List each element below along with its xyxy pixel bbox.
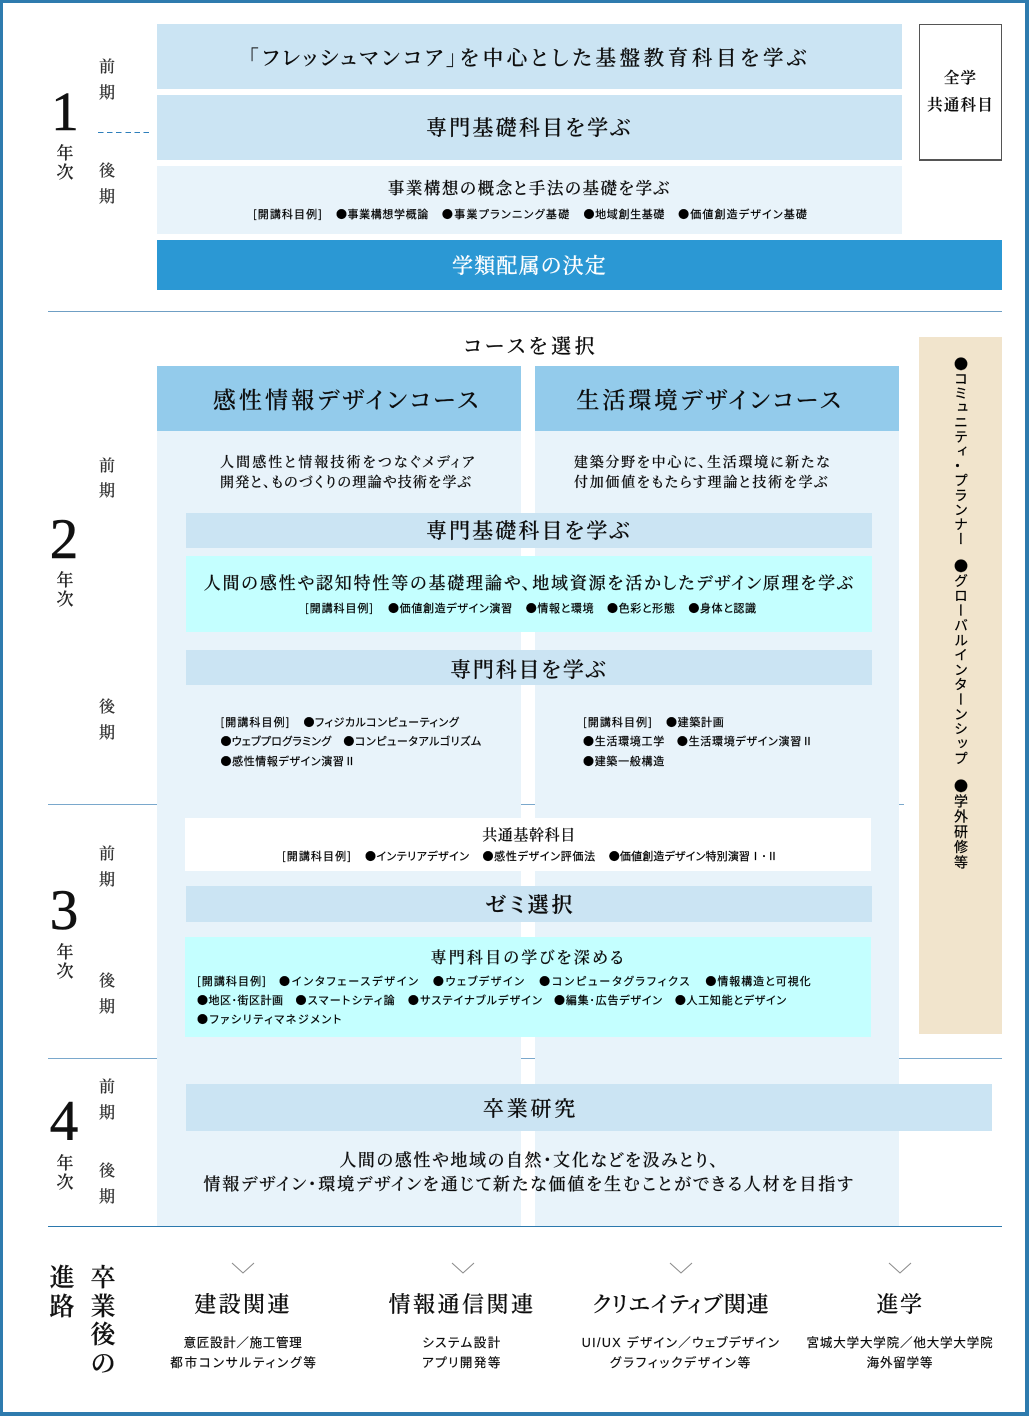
panel: basic theory xyxy=(186,556,872,632)
course examples: sensibility: ●感性情報デザイン演習Ⅱ xyxy=(220,752,356,768)
career details: UI/UX デザイン／ウェブデザイン xyxy=(582,1336,780,1350)
term labels: year 4: 前 xyxy=(99,1079,115,1096)
bar: basic subjects 2: 専門基礎科目を学ぶ xyxy=(426,518,632,542)
course examples: sensibility: ●ウェブプログラミング ●コンピュータアルゴリズム xyxy=(220,733,482,749)
course description: environment: 付加価値をもたらす理論と技術を学ぶ xyxy=(574,476,830,491)
term labels: year 3: 後 xyxy=(99,973,115,990)
band heading: 事業構想の概念と手法の基礎を学ぶ xyxy=(388,179,671,198)
panel heading: 専門科目の学びを深める xyxy=(431,950,625,967)
career details: 海外留学等 xyxy=(867,1352,933,1371)
year 2 label: 2 xyxy=(50,508,78,571)
career details xyxy=(582,1336,780,1370)
course examples xyxy=(197,973,812,1027)
career: further study xyxy=(807,1262,993,1371)
course examples: environment: ●建築一般構造 xyxy=(583,752,665,768)
course examples: [開講科目例] ●価値創造デザイン演習 ●情報と環境 ●色彩と形態 ●身体と認識 xyxy=(305,600,757,616)
icon: chevron xyxy=(232,1262,254,1274)
course header: environment xyxy=(535,366,899,431)
term labels: year 1: 後 xyxy=(99,163,115,180)
icon: chevron xyxy=(452,1262,474,1274)
year 1 label: 1 xyxy=(51,81,79,142)
term labels: year 2: 期 xyxy=(99,725,115,742)
course header: sensibility xyxy=(157,366,521,431)
career details: 都市コンサルティング等 xyxy=(170,1352,318,1371)
heading: careers after graduation xyxy=(49,1264,116,1378)
panel: deepen learning xyxy=(185,937,871,1037)
goal statement: 情報デザイン･環境デザインを通じて新たな価値を生むことができる人材を目指す xyxy=(203,1175,855,1194)
panel heading: 人間の感性や認知特性等の基礎理論や、地域資源を活かしたデザイン原理を学ぶ xyxy=(204,574,855,593)
year 2 label: 年 xyxy=(56,571,74,590)
band: business concept xyxy=(157,166,902,234)
column: sensibility course xyxy=(157,431,521,1226)
year 1 label: 次 xyxy=(56,163,74,182)
heading: careers after graduation: 卒 xyxy=(90,1265,116,1292)
panel heading: 共通基幹科目 xyxy=(482,828,576,844)
term labels: year 2: 後 xyxy=(99,699,115,716)
year 4 label: 4 xyxy=(50,1090,78,1153)
course examples: ●ファシリティマネジメント xyxy=(197,1011,343,1027)
tan panel: global programs xyxy=(919,337,1002,1034)
course examples: sensibility: [開講科目例] ●フィジカルコンピューティング xyxy=(220,714,459,730)
course description: sensibility: 開発と、ものづくりの理論や技術を学ぶ xyxy=(220,476,473,491)
term labels: year 3: 前 xyxy=(99,846,115,863)
course description: sensibility xyxy=(220,454,476,491)
course header: sensibility: 感性情報デザインコース xyxy=(213,388,481,413)
bar: seminar xyxy=(186,886,872,922)
bar: seminar: ゼミ選択 xyxy=(485,893,576,917)
band: freshman core: 「フレッシュマンコア」を中心とした基盤教育科目を学ぶ xyxy=(248,48,811,70)
career heading: 進学 xyxy=(876,1292,924,1317)
program 1: ●コミュニティ・プランナー xyxy=(951,357,971,546)
career details xyxy=(170,1332,318,1371)
bar: graduation research xyxy=(186,1084,992,1131)
term labels: year 2: 期 xyxy=(99,483,115,500)
heading: careers after graduation: 業 xyxy=(90,1294,116,1320)
box: common subjects: 共通科目 xyxy=(927,97,994,114)
career details xyxy=(422,1332,502,1371)
course examples: environment: ●生活環境工学 ●生活環境デザイン演習Ⅱ xyxy=(583,733,814,749)
bar: specialist subjects: 専門科目を学ぶ xyxy=(450,658,608,682)
year 2 label: 次 xyxy=(56,590,74,609)
term labels: year 1 xyxy=(99,58,115,206)
year 4 label: 次 xyxy=(56,1173,74,1192)
course examples: [開講科目例] ●事業構想学概論 ●事業プランニング基礎 ●地域創生基礎 ●価値創造デザイン基礎 xyxy=(253,206,808,222)
heading: careers after graduation: 路 xyxy=(49,1294,74,1320)
career heading: 建設関連 xyxy=(194,1292,292,1317)
career details: システム設計 xyxy=(422,1332,502,1351)
divider lines xyxy=(48,311,1002,312)
year 4 label xyxy=(50,1090,78,1192)
program 3: ●学外研修等 xyxy=(951,779,971,870)
year 3 label: 次 xyxy=(56,962,74,981)
icon: chevron xyxy=(888,1262,912,1274)
program 2: ●グローバルインターンシップ xyxy=(951,559,971,766)
course examples: environment: [開講科目例] ●建築計画 xyxy=(583,714,724,730)
box: common subjects: 全学 xyxy=(944,70,977,87)
career heading: クリエイティブ関連 xyxy=(593,1292,769,1317)
year 1 label: 年 xyxy=(56,144,74,163)
term labels: year 2: 前 xyxy=(99,458,115,475)
goal statement xyxy=(203,1151,855,1194)
term labels: year 4: 期 xyxy=(99,1105,115,1122)
career details xyxy=(807,1332,993,1371)
career: creative xyxy=(582,1262,780,1370)
band: basic subjects xyxy=(157,95,902,160)
career details: アプリ開発等 xyxy=(422,1352,502,1371)
year 2 label xyxy=(50,508,78,609)
term labels: year 4 xyxy=(99,1078,115,1206)
term labels: year 2 xyxy=(99,457,115,742)
career details: グラフィックデザイン等 xyxy=(610,1356,752,1370)
box: common subjects xyxy=(919,24,1002,161)
heading: careers after graduation: 進 xyxy=(49,1265,74,1292)
heading: choose course: コースを選択 xyxy=(463,336,599,358)
term divider dashed xyxy=(98,132,149,133)
career: information xyxy=(388,1262,536,1371)
year 3 label: 年 xyxy=(56,943,74,962)
term labels: year 3: 期 xyxy=(99,872,115,889)
career: construction xyxy=(170,1262,318,1371)
term labels: year 1: 期 xyxy=(99,189,115,206)
course examples: environment xyxy=(583,714,814,768)
year 3 label xyxy=(50,879,78,981)
band: freshman core xyxy=(157,24,902,89)
course examples: [開講科目例] ●インテリアデザイン ●感性デザイン評価法 ●価値創造デザイン特別演習Ⅰ･Ⅱ xyxy=(282,848,778,864)
year 1 label xyxy=(51,81,79,182)
course description: environment xyxy=(574,454,831,491)
course description: sensibility: 人間感性と情報技術をつなぐメディア xyxy=(220,456,476,471)
bar: department decision: 学類配属の決定 xyxy=(452,254,607,278)
bar: department decision xyxy=(157,240,1002,290)
year 3 label: 3 xyxy=(50,879,78,942)
heading: careers after graduation: の xyxy=(90,1350,116,1378)
panel: common core xyxy=(185,818,871,871)
course examples: ●地区･街区計画 ●スマートシティ論 ●サステイナブルデザイン ●編集･広告デザイン ●人工知能とデザイン xyxy=(197,992,787,1008)
column: environment course xyxy=(535,431,899,1226)
term labels: year 1: 期 xyxy=(99,85,115,102)
term labels: year 1: 前 xyxy=(99,59,115,76)
career details: 意匠設計／施工管理 xyxy=(184,1332,302,1351)
course header: environment: 生活環境デザインコース xyxy=(576,388,844,413)
career heading: 情報通信関連 xyxy=(388,1292,536,1317)
term labels: year 3 xyxy=(99,845,115,1016)
bar: graduation research: 卒業研究 xyxy=(483,1096,578,1120)
course examples: [開講科目例] ●インタフェースデザイン ●ウェブデザイン ●コンピュータグラフィクス ●情報構造と可視化 xyxy=(197,973,812,989)
band: basic subjects: 専門基礎科目を学ぶ xyxy=(426,116,633,140)
goal statement: 人間の感性や地域の自然･文化などを汲みとり、 xyxy=(339,1151,720,1170)
term labels: year 4: 期 xyxy=(99,1189,115,1206)
icon: chevron xyxy=(670,1262,692,1274)
bar: basic subjects 2 xyxy=(186,513,872,548)
course examples: sensibility xyxy=(220,714,482,768)
term labels: year 4: 後 xyxy=(99,1163,115,1180)
term labels: year 3: 期 xyxy=(99,999,115,1016)
bar: specialist subjects xyxy=(186,650,872,685)
career details: 宮城大学大学院／他大学大学院 xyxy=(807,1332,993,1351)
year 4 label: 年 xyxy=(56,1154,74,1173)
heading: careers after graduation: 後 xyxy=(90,1322,116,1349)
course description: environment: 建築分野を中心に、生活環境に新たな xyxy=(574,456,831,471)
